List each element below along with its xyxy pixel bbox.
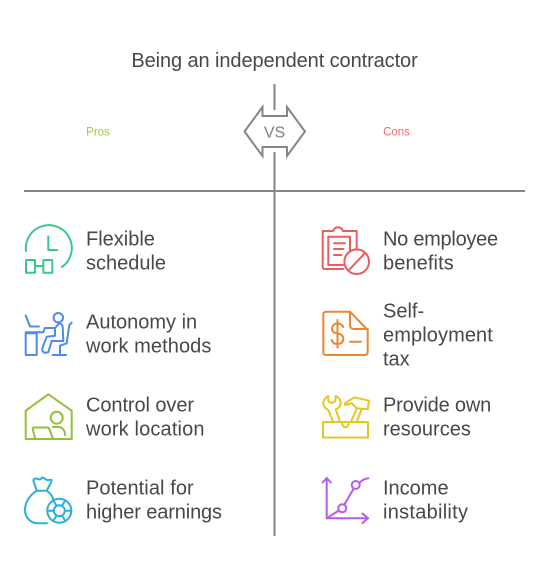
icon: clock and glasses xyxy=(26,225,72,273)
cons heading: Cons xyxy=(383,126,410,138)
icon: toolbox xyxy=(323,396,369,438)
icon: line chart xyxy=(323,478,368,523)
pro item: autonomy xyxy=(26,312,211,358)
vs badge: VS xyxy=(264,124,285,142)
text: higher earnings: higher earnings xyxy=(86,502,222,524)
text: autonomy: Autonomy in xyxy=(86,312,197,334)
text: income instability: Income xyxy=(383,478,449,500)
icon: tax document xyxy=(323,312,368,355)
text: autonomy: work methods xyxy=(85,336,211,358)
text: self-employment tax: tax xyxy=(383,348,410,370)
title: Being an independent contractor xyxy=(131,50,418,72)
text: provide own resources: Provide own xyxy=(383,394,491,416)
vertical divider xyxy=(274,84,276,536)
pro item: higher earnings xyxy=(25,477,222,524)
text: income instability: instability xyxy=(383,502,468,524)
pro item: flexible schedule xyxy=(26,225,166,274)
icon: clipboard with prohibition xyxy=(323,227,369,274)
text: provide own resources: resources xyxy=(383,418,471,440)
icon: money bag xyxy=(25,477,71,523)
con item: provide own resources xyxy=(323,394,491,440)
text: control over location: work location xyxy=(85,418,205,440)
text: higher earnings: Potential for xyxy=(86,478,194,500)
con item: income instability xyxy=(323,478,468,524)
icon: person at desk xyxy=(26,313,72,355)
icon: house with person xyxy=(26,394,72,439)
text: no employee benefits: benefits xyxy=(383,252,454,274)
pros heading: Pros xyxy=(86,126,110,138)
text: self-employment tax: employment xyxy=(383,324,493,346)
text: self-employment tax: Self- xyxy=(383,300,424,322)
horizontal divider xyxy=(24,190,525,192)
text: flexible schedule: Flexible xyxy=(86,228,155,250)
text: control over location: Control over xyxy=(86,394,194,416)
vs badge xyxy=(244,107,305,156)
text: no employee benefits: No employee xyxy=(383,228,498,250)
pro item: control over location xyxy=(26,394,205,440)
con item: no employee benefits xyxy=(323,227,498,274)
con item: self-employment tax xyxy=(323,300,493,370)
text: flexible schedule: schedule xyxy=(86,252,166,274)
